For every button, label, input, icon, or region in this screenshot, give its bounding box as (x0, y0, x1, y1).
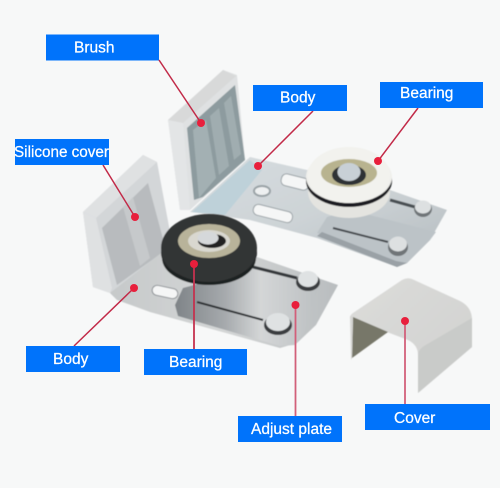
callout: Bearing (bottom): Bearing (169, 354, 222, 371)
body plate: front (110, 250, 338, 348)
callout: Body (bottom): Body (53, 351, 89, 368)
callout: Body (top): Body (280, 90, 316, 106)
callout: Body (top) (253, 85, 347, 170)
callout: Cover: Cover (394, 410, 435, 427)
brush strips (187, 85, 245, 200)
callout: Brush: Brush (74, 40, 114, 56)
adjust plate (175, 268, 318, 346)
white wheel (306, 147, 392, 218)
product: front bracket with silicone cover (83, 155, 338, 348)
callout: Silicone cover: Silicone cover (14, 144, 109, 161)
body plate: rear (190, 157, 447, 267)
callout: Bearing (bottom) (144, 260, 247, 375)
product: rear bracket with brush (168, 70, 447, 267)
brush frame (168, 70, 245, 210)
callout: Cover (365, 317, 490, 430)
bolt: front lower (264, 313, 292, 335)
callout: Brush (46, 34, 205, 127)
product: cover (350, 278, 472, 393)
callout: Adjust plate (238, 301, 342, 442)
bolt: front upper (296, 271, 320, 291)
bolt: rear lower (388, 236, 408, 256)
callout: Silicone cover (14, 139, 139, 221)
callout: Body (bottom) (26, 284, 138, 372)
callout: Adjust plate: Adjust plate (251, 421, 332, 438)
callout: Bearing (top) (374, 82, 483, 165)
black wheel (161, 214, 257, 285)
callout: Bearing (top): Bearing (400, 85, 453, 102)
silicone frame (83, 155, 170, 293)
bolt: rear upper (414, 200, 432, 217)
